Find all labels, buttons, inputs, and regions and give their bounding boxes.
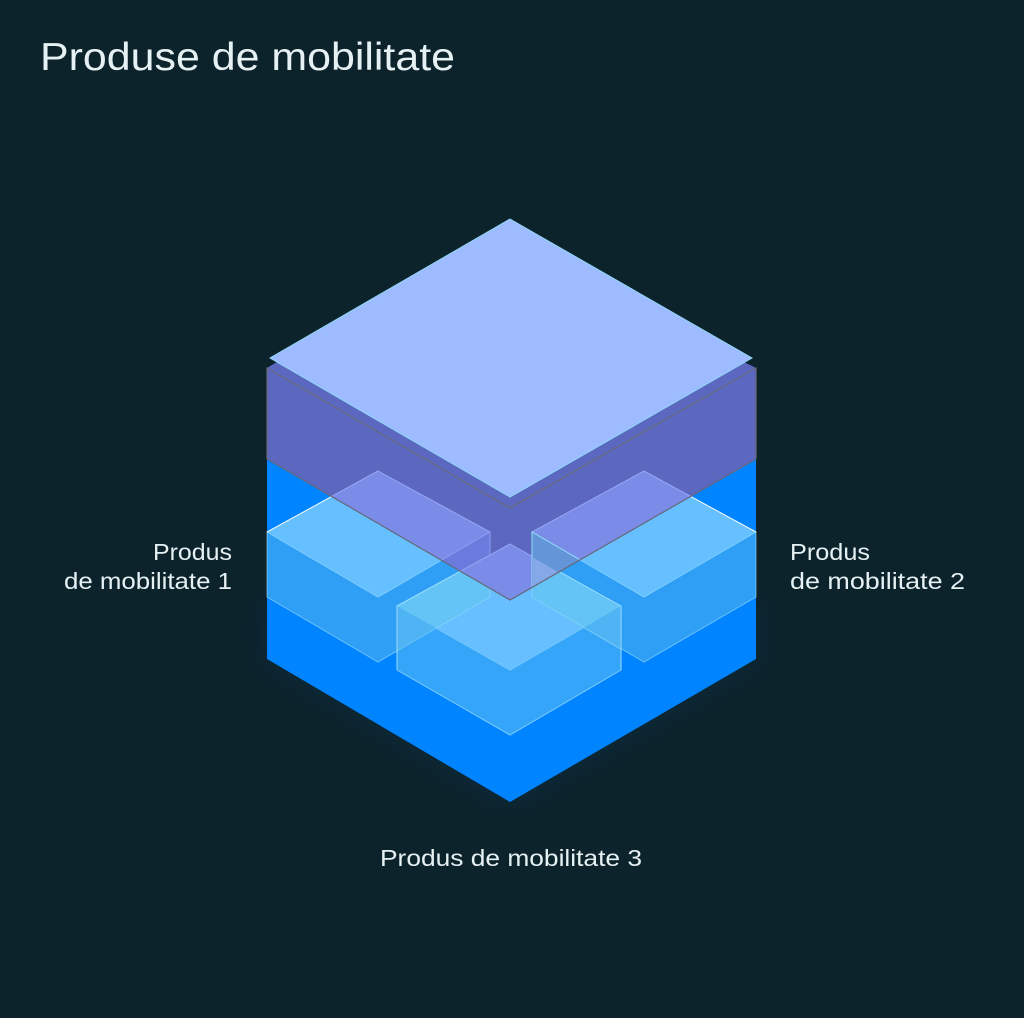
box: product 2: [532, 471, 756, 662]
title: Produse de mobilitate: [40, 36, 455, 79]
isometric layered cube diagram: [267, 219, 756, 802]
label: product 1: de mobilitate 1: [64, 568, 232, 594]
box: product 3: [397, 544, 621, 735]
see-through overlaps of the neighbouring boxes: [397, 606, 436, 651]
middle layer: purple band: [267, 362, 756, 600]
box: product 1: [267, 471, 490, 662]
label: product 2: Produs: [790, 539, 870, 565]
label: product 1: Produs: [153, 539, 232, 565]
label: product 2: [790, 539, 965, 594]
base layer: blue body: [267, 320, 756, 802]
label: product 3: Produs de mobilitate 3: [380, 845, 642, 871]
top layer: light periwinkle plate: [270, 219, 752, 497]
box shapes seen through the purple band: [332, 470, 690, 600]
label: product 1: [64, 539, 232, 594]
translucent lower edges of box 1 and box 2 seen through box 3: [397, 532, 621, 651]
label: product 2: de mobilitate 2: [790, 568, 965, 594]
purple band edge lines: [267, 368, 756, 600]
soft glow beneath the cube: [267, 600, 756, 802]
